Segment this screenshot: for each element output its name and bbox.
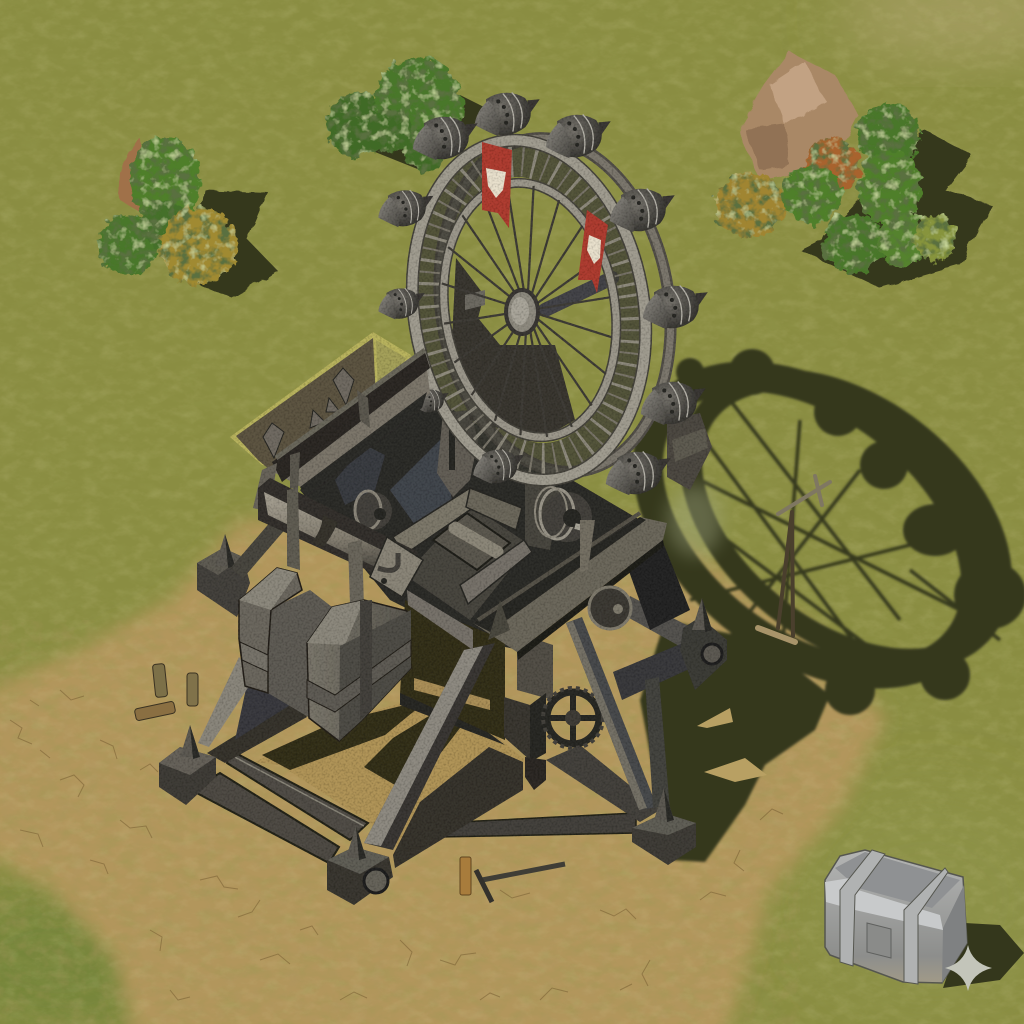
forward right spike xyxy=(654,788,674,822)
base frame xyxy=(191,670,660,868)
small wooden signpost xyxy=(758,476,830,642)
pulley wheels xyxy=(354,487,592,542)
diagonal braces xyxy=(198,617,670,850)
wheel front ring xyxy=(389,123,669,497)
crate body xyxy=(825,850,967,983)
wheel back rim xyxy=(416,121,694,489)
small pulley under ramp xyxy=(589,587,631,629)
central deck frame xyxy=(393,488,532,650)
wheel support towers xyxy=(437,410,712,550)
red banner left xyxy=(482,142,512,228)
corner block: right xyxy=(632,813,696,865)
machinery seen through the wheel xyxy=(452,258,612,440)
gear xyxy=(543,688,603,748)
wheel spokes xyxy=(424,171,630,450)
tree cluster: top center xyxy=(326,57,490,172)
sunlit gaps in machine shadow xyxy=(697,708,767,782)
ground: dirt patch xyxy=(0,520,885,1024)
crate straps xyxy=(840,850,885,966)
hopper tray xyxy=(230,332,420,470)
hammer and post xyxy=(460,857,565,902)
metal crate xyxy=(825,850,1024,988)
dark under-deck structure xyxy=(400,535,690,745)
shadow of the wheel xyxy=(592,316,1024,862)
tree and rock cluster: top right xyxy=(714,52,992,288)
red banner right xyxy=(578,210,608,293)
spent shells xyxy=(134,663,198,721)
tree cluster: left xyxy=(98,136,277,298)
ground cracks xyxy=(10,690,813,1000)
sparkle mark xyxy=(945,945,992,991)
ground shadows under machine xyxy=(255,700,525,850)
corner block: left xyxy=(159,725,216,805)
counterweight block xyxy=(239,568,411,741)
hopper spikes xyxy=(263,368,354,458)
rear base right xyxy=(613,596,727,700)
rear base left xyxy=(197,523,280,617)
spiked heads around the wheel xyxy=(378,92,708,495)
crate shadow xyxy=(943,923,1024,988)
wheel hub xyxy=(506,290,538,334)
upper guide rails xyxy=(253,350,430,512)
rear dark hold with blue floor xyxy=(300,390,640,650)
rock xyxy=(738,52,858,180)
central column xyxy=(504,633,553,790)
right ramp beam xyxy=(473,513,667,660)
corner block: front xyxy=(327,826,393,905)
axle beam xyxy=(258,478,423,608)
machine xyxy=(159,92,727,905)
pale dust haze xyxy=(667,484,723,556)
